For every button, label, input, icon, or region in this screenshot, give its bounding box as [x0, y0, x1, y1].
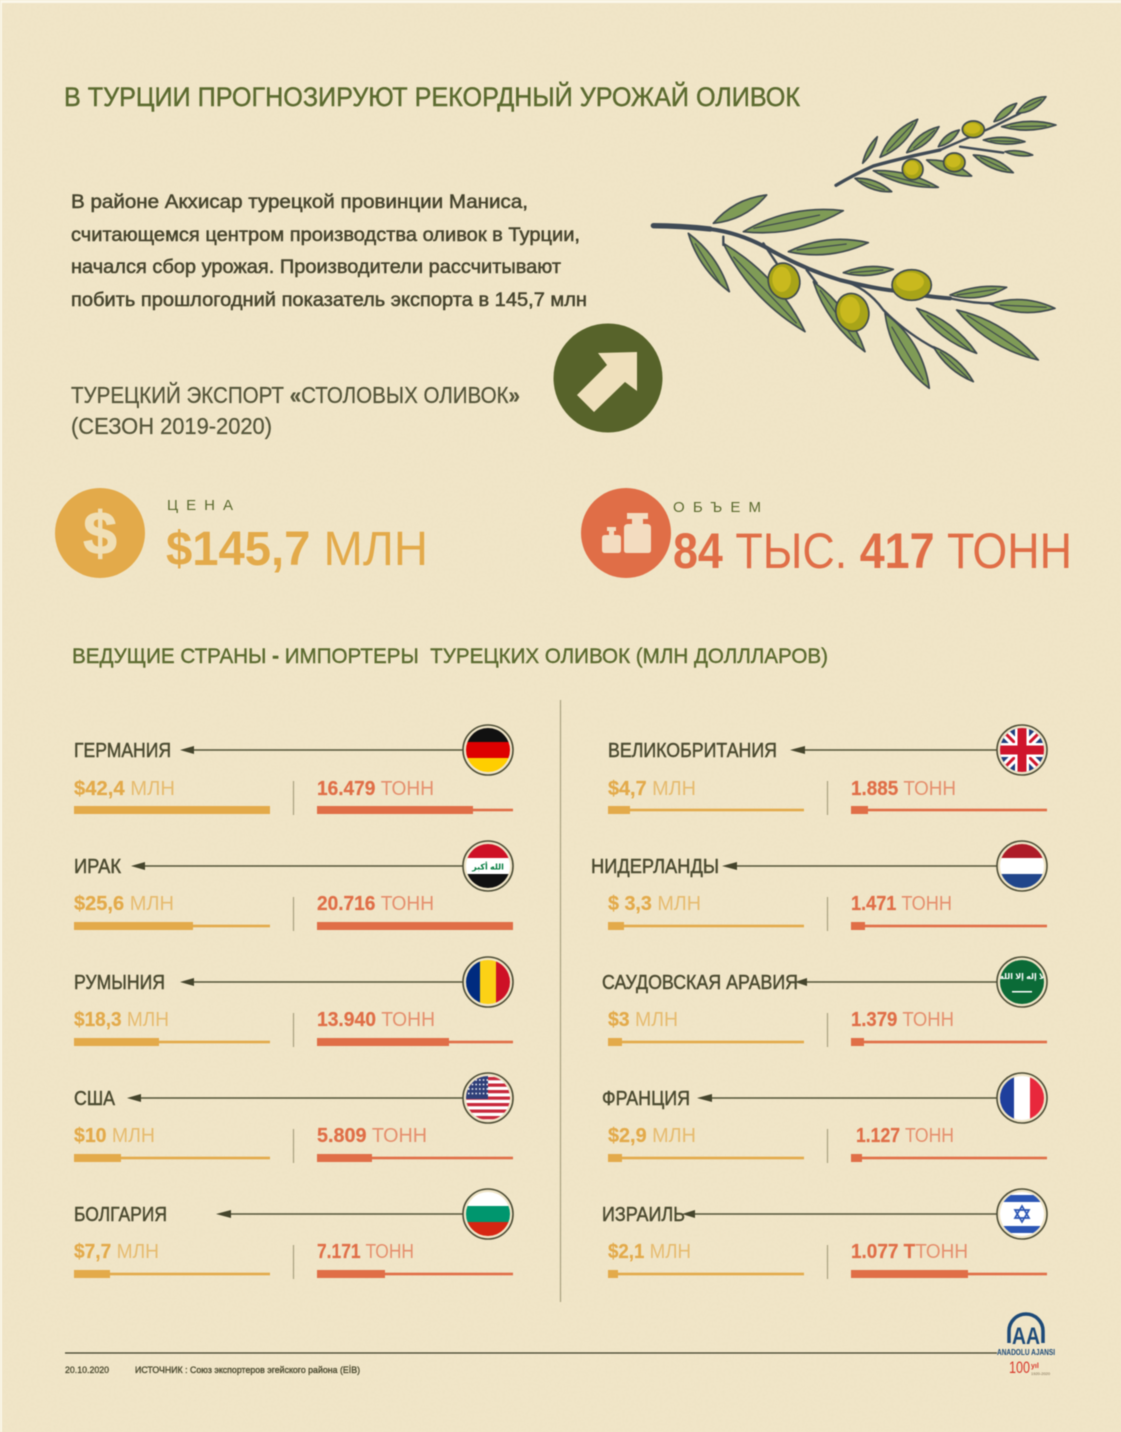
intro text block: В районе Акхисар турецкой провинции Маниса, [71, 192, 528, 213]
row: Netherlands: $ 3,3 МЛН [608, 893, 701, 915]
row: France: ФРАНЦИЯ [602, 1088, 690, 1110]
logo: Anadolu Ajansi: yıl [1031, 1363, 1039, 1370]
icon: dollar coin [55, 488, 145, 578]
icon: dollar coin: $ [83, 500, 117, 567]
logo: Anadolu Ajansi [997, 1314, 1055, 1377]
row: Israel: $2,1 МЛН [608, 1241, 691, 1263]
row: Bulgaria: $7,7 МЛН [74, 1241, 159, 1263]
intro text block: начался сбор урожая. Производители рассчитывают [71, 257, 561, 278]
row: France: 1.127 ТОНН [856, 1125, 954, 1147]
row: USA: $10 МЛН [74, 1125, 155, 1147]
row: Romania: $18,3 МЛН [74, 1009, 169, 1031]
row: France: $2,9 МЛН [608, 1125, 696, 1147]
row: USA: США [74, 1088, 116, 1110]
export heading [71, 381, 520, 439]
importers heading: ВЕДУЩИЕ СТРАНЫ - ИМПОРТЕРЫ ТУРЕЦКИХ ОЛИВОК (МЛН ДОЛЛЛАРОВ) [72, 644, 828, 668]
row: Germany: $42,4 МЛН [74, 778, 175, 800]
row: France [602, 1073, 1047, 1163]
row: USA [74, 1073, 513, 1163]
row: Netherlands [591, 841, 1047, 931]
price label: ЦЕНА [167, 497, 233, 514]
row: Iraq: الله أكبر [471, 862, 504, 872]
icon: weights [581, 488, 671, 578]
row: Romania [74, 957, 513, 1047]
row: Israel [602, 1189, 1047, 1279]
row: Germany: 16.479 ТОНН [317, 778, 434, 800]
row: Iraq: $25,6 МЛН [74, 893, 174, 915]
row: Iraq: 20.716 ТОНН [317, 893, 434, 915]
small olive branch [836, 97, 1056, 192]
price value: $145,7 МЛН [166, 523, 428, 576]
logo: Anadolu Ajansi: AA [1012, 1323, 1040, 1350]
row: Netherlands: 1.471 ТОНН [851, 893, 952, 915]
row: United Kingdom [608, 725, 1047, 815]
volume stat [581, 488, 1072, 579]
row: United Kingdom: 1.885 ТОНН [851, 778, 956, 800]
row: Bulgaria: БОЛГАРИЯ [74, 1204, 167, 1226]
intro text block [71, 192, 587, 311]
row: United Kingdom: ВЕЛИКОБРИТАНИЯ [608, 740, 777, 762]
row: Saudi Arabia: САУДОВСКАЯ АРАВИЯ [602, 972, 798, 994]
intro text block: побить прошлогодний показатель экспорта в 145,7 млн [71, 290, 587, 311]
icon: up-right arrow [554, 324, 662, 432]
row: Romania: РУМЫНИЯ [74, 972, 165, 994]
price stat [55, 488, 428, 578]
title: В ТУРЦИИ ПРОГНОЗИРУЮТ РЕКОРДНЫЙ УРОЖАЙ ОЛИВОК [64, 81, 800, 112]
row: Saudi Arabia: $3 МЛН [608, 1009, 678, 1031]
row: Romania: 13.940 ТОНН [317, 1009, 435, 1031]
intro text block: считающемся центром производства оливок в Турции, [71, 225, 580, 246]
row: Bulgaria: 7.171 ТОНН [317, 1241, 414, 1263]
logo: Anadolu Ajansi: ANADOLU AJANSI [997, 1348, 1055, 1357]
row: Israel: ИЗРАИЛЬ [602, 1204, 685, 1226]
row: Iraq [74, 841, 513, 931]
icon: olive branches [653, 97, 1056, 388]
logo: Anadolu Ajansi: 100 [1009, 1358, 1030, 1377]
row: United Kingdom: $4,7 МЛН [608, 778, 696, 800]
row: Germany [74, 725, 513, 815]
row: Israel: 1.077 ТТОНН [851, 1241, 968, 1263]
footer date: 20.10.2020 [65, 1365, 109, 1376]
row: Saudi Arabia: لا إله إلا الله [999, 972, 1045, 981]
export heading: ТУРЕЦКИЙ ЭКСПОРТ «СТОЛОВЫХ ОЛИВОК» [71, 381, 520, 408]
row: Saudi Arabia: 1.379 ТОНН [851, 1009, 954, 1031]
row: Germany: ГЕРМАНИЯ [74, 740, 171, 762]
footer source: ИСТОЧНИК : Союз экспортеров эгейского района (EİB) [135, 1365, 360, 1376]
row: Saudi Arabia [602, 957, 1047, 1047]
volume value: 84 ТЫС. 417 ТОНН [673, 523, 1072, 579]
large olive branch [653, 195, 1055, 388]
volume label: ОБЪЕМ [673, 499, 761, 516]
export heading: (СЕЗОН 2019-2020) [71, 413, 272, 439]
logo: Anadolu Ajansi: 1920-2020 [1031, 1371, 1051, 1376]
row: Iraq: ИРАК [74, 856, 121, 878]
row: Netherlands: НИДЕРЛАНДЫ [591, 856, 719, 878]
row: Bulgaria [74, 1189, 513, 1279]
row: USA: 5.809 ТОНН [317, 1125, 427, 1147]
